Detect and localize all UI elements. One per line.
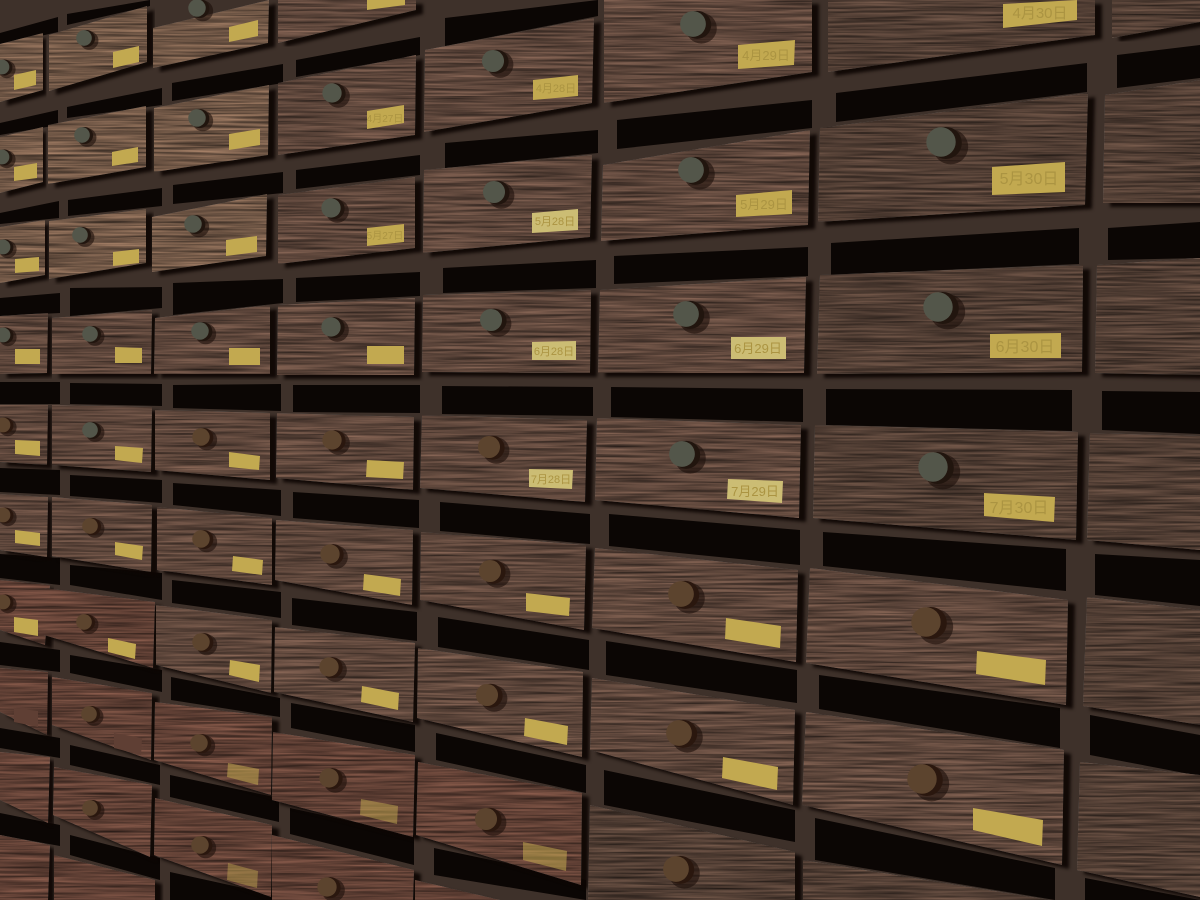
drawer row 6 [802,712,1064,865]
drawer column 3 [152,0,272,897]
drawer row 6 [52,497,152,572]
drawer row 5 [52,405,152,472]
drawer row 2 [601,130,810,241]
drawer row 4: 7月29日 [731,484,779,499]
drawer row 2: 5月28日 [535,216,575,228]
drawer row 6 [275,520,413,605]
drawer row 3: 6月29日 [734,341,782,356]
drawer row 8 [415,880,500,900]
drawer row 2 [423,155,592,253]
drawer row 3: 6月28日 [534,346,574,358]
drawer column 1 [0,33,50,900]
drawer row 2: 4月27日 [367,113,403,125]
drawer row 4: 7月28日 [531,474,571,486]
drawer column 2 [44,6,155,900]
drawer row 4 [595,418,801,518]
drawer row 4 [277,298,415,375]
drawer row 8 [154,702,272,795]
drawer row 3: 5月27日 [367,230,403,242]
drawer row 5 [276,413,414,490]
drawer column 5 [415,18,594,900]
drawer row 8 [272,732,415,837]
drawer row 4 [154,305,270,374]
drawer row 3 [152,194,267,272]
drawer column 4 [272,0,416,900]
drawer row 2: 5月30日 [1000,171,1058,188]
drawer row 2 [278,55,416,155]
drawer row 2 [48,106,146,184]
drawer row 7 [44,588,155,668]
drawer row 9 [272,835,414,900]
drawer row 2: 5月29日 [740,197,788,212]
drawer row 1 [153,0,269,68]
drawer row 5 [155,410,270,480]
drawer row 5 [592,548,798,662]
drawer row 4: 7月30日 [990,500,1048,517]
drawer row 3 [817,265,1083,374]
drawer row 2 [154,85,269,172]
drawer row 1 [828,0,1095,72]
drawer row 4 [420,415,587,502]
drawer row 5 [420,532,586,630]
drawer row 6 [157,507,272,585]
drawer row 8 [52,677,152,760]
drawer row 5 [806,568,1068,705]
drawer row 10 [54,855,155,900]
drawer column 8 [1077,0,1200,897]
drawer row 9 [53,767,152,857]
drawer row 1 [49,6,147,91]
drawer row 6 [590,678,795,805]
drawer row 9 [154,798,272,897]
drawer row 1: 4月28日 [536,83,576,95]
drawer row 3 [278,177,415,264]
drawer row 6 [417,648,583,757]
drawer row 1: 4月29日 [742,48,790,63]
drawer row 1 [278,0,416,43]
drawer row 7 [588,805,795,900]
drawer row 1 [424,18,594,132]
drawer row 4 [52,310,152,374]
drawer row 7 [156,605,272,693]
drawer row 3 [598,277,806,373]
drawer row 3 [422,290,591,373]
drawer row 7 [416,762,582,885]
drawer row 1 [604,0,812,103]
drawer row 7 [274,627,415,722]
drawer row 3: 6月30日 [996,339,1054,356]
drawer column 6 [588,0,812,900]
drawer row 7 [803,860,1050,900]
drawer row 3 [49,209,146,279]
drawer row 4 [813,425,1078,540]
drawer row 1: 4月30日 [1012,5,1068,22]
drawer column 7 [802,0,1095,900]
drawer row 2 [818,93,1088,222]
